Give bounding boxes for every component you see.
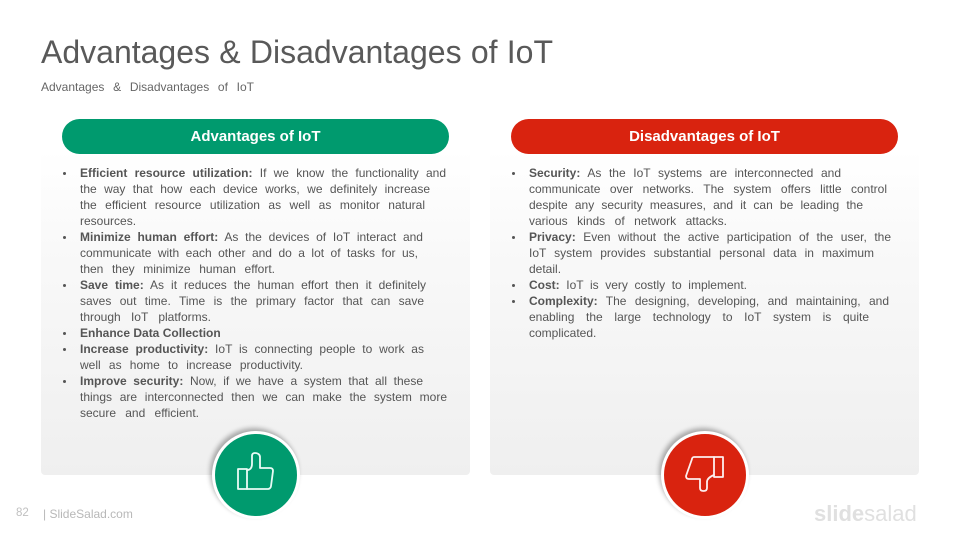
text block: disadvantages list: Complexity: The designing, developing, and maintaining, and [529,294,889,308]
text block: disadvantages list: complicated. [529,326,596,340]
text block: disadvantages list [512,166,891,340]
title: Advantages & Disadvantages of IoT [41,34,553,70]
panel: disadvantages background [490,150,919,475]
text block: disadvantages list: enabling the large technology to IoT system is quite [529,310,869,324]
footer brand text: | SlideSalad.com [43,507,133,521]
heading: disadvantages: Disadvantages of IoT [629,128,780,145]
text block: disadvantages list: despite any security measures, and it can be leading the [529,198,863,212]
text block: advantages list: secure and efficient. [80,406,199,420]
text block: advantages list: through IoT platforms. [80,310,211,324]
subtitle: Advantages & Disadvantages of IoT [41,80,254,94]
heading: advantages [62,119,449,154]
text block: disadvantages list: IoT system provides substantial personal data in maximum [529,246,874,260]
page number: 82 [16,507,29,519]
text block: disadvantages list: various kinds of network attacks. [529,214,727,228]
text block: advantages list: well as home to increase productivity. [80,358,303,372]
text block: disadvantages list: detail. [529,262,561,276]
logo: slidesalad: slidesalad [814,501,917,526]
text block: advantages list: resources. [80,214,136,228]
panel: advantages background [41,150,470,475]
text block: advantages list: saves out time. Time is the primary factor that can save [80,294,424,308]
text block: advantages list: the way that how each device works, we definitely increase [80,182,430,196]
text block: advantages list: Enhance Data Collection [80,326,221,340]
text block: advantages list: Efficient resource utilization: If we know the functionality and [80,166,446,180]
text block: disadvantages list: Cost: IoT is very costly to implement. [529,278,747,292]
text block: advantages list: communicate with each other and do a lot of tasks for us, [80,246,418,260]
text block: advantages list: Increase productivity: IoT is connecting people to work as [80,342,424,356]
text block: advantages list: Improve security: Now, if we have a system that all these [80,374,423,388]
text block: advantages list [63,166,447,420]
text block: disadvantages list: Privacy: Even without the active participation of the user, the [529,230,891,244]
icon: thumbs up badge [212,431,300,519]
text block: advantages list: Save time: As it reduces the human effort then it definitely [80,278,426,292]
text block: advantages list: the efficient resource utilization as well as monitor natural [80,198,425,212]
text block: disadvantages list: communicate over networks. The system offers little control [529,182,887,196]
heading: advantages: Advantages of IoT [190,128,320,145]
text block: disadvantages list: Security: As the IoT systems are interconnected and [529,166,841,180]
text block: advantages list: things are interconnected then we can make the system more [80,390,447,404]
text block: advantages list: Minimize human effort: As the devices of IoT interact and [80,230,423,244]
text block: advantages list: then they minimize human effort. [80,262,275,276]
icon: thumbs down badge [661,431,749,519]
heading: disadvantages [511,119,898,154]
